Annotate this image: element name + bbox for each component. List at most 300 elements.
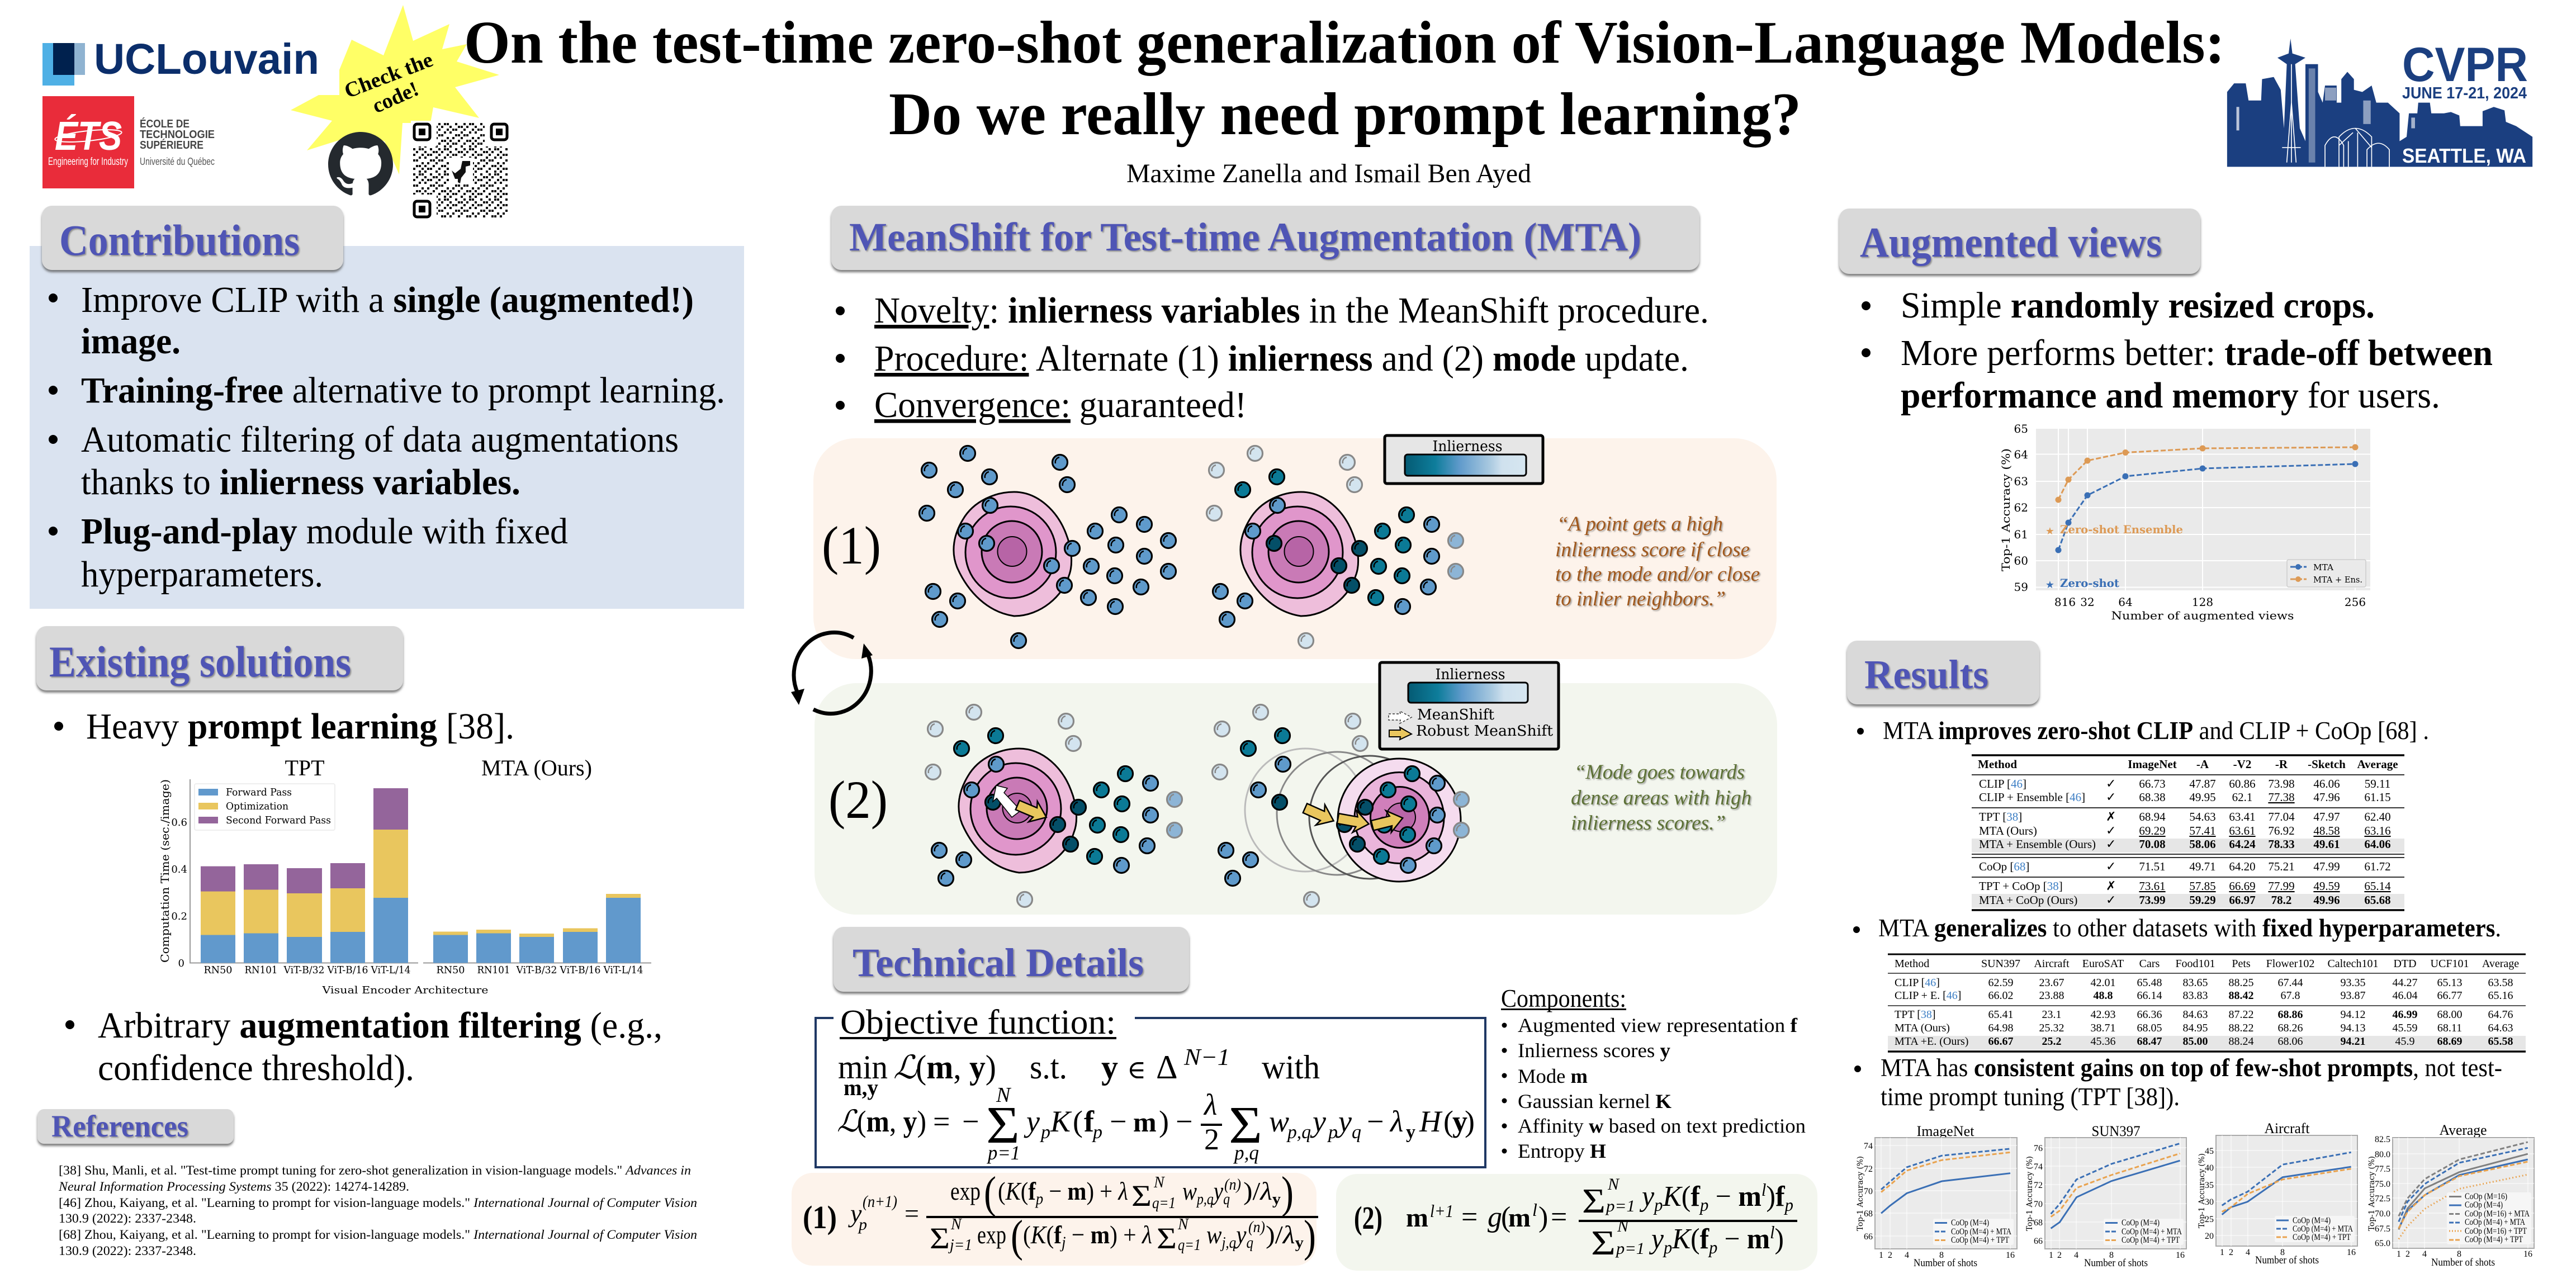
table body: ✓ xyxy=(2106,776,2116,790)
formula: loss definition: f xyxy=(1084,1105,1095,1138)
line chart: Aircraft: 45 xyxy=(2205,1147,2214,1156)
text block: references: [46] Zhou, Kaiyang, et al. "Learning to prompt for vision-language models." International Journal of Computer Vision xyxy=(59,1196,697,1210)
numerator: p=1 xyxy=(1605,1197,1635,1215)
line chart: Average: Top-1 Accuracy (%) xyxy=(2367,1156,2376,1231)
line chart: Aircraft: 30 xyxy=(2205,1197,2214,1207)
axis labels: RN50 xyxy=(436,964,465,976)
table body: 83.65 xyxy=(2182,977,2208,989)
denominator: N xyxy=(950,1216,962,1233)
legend: inlierness and arrows (2): Inlierness xyxy=(1436,666,1505,683)
table body: 57.41 xyxy=(2189,824,2216,837)
line chart: SUN397: CoOp (M=4) + TPT xyxy=(2122,1235,2180,1245)
legend: inlierness and arrows (2): Robust MeanShift xyxy=(1416,723,1554,740)
line chart: Average: 65.0 xyxy=(2375,1239,2390,1248)
numerator: − xyxy=(1043,1177,1068,1205)
logo: ETS xyxy=(42,96,215,188)
table body: 59.29 xyxy=(2189,893,2216,907)
line chart: SUN397: 74 xyxy=(2034,1162,2043,1172)
axis labels: RN101 xyxy=(245,964,277,976)
formula: loss definition: − xyxy=(962,1105,979,1138)
formula: minimisation: N−1 xyxy=(1183,1045,1230,1071)
line chart: SUN397: 16 xyxy=(2176,1251,2185,1260)
table body: 66.67 xyxy=(1988,1035,2014,1048)
heading: technical details: Technical Details xyxy=(853,940,1144,985)
quote: inlierness: to inlier neighbors.” xyxy=(1555,588,1726,610)
table body: TPT + CoOp [38] xyxy=(1979,879,2063,893)
denominator: m) + λ xyxy=(1091,1220,1153,1249)
formula: loss definition: p,q xyxy=(1233,1142,1259,1164)
text block: references: Neural Information Processing Systems 35 (2022): 14274-14289. xyxy=(58,1180,409,1194)
denominator: p=1 xyxy=(1615,1239,1645,1258)
text block: references xyxy=(58,1163,697,1258)
table body: 73.98 xyxy=(2268,777,2295,790)
table body: ✓ xyxy=(2106,823,2116,837)
axis labels: ViT-B/32 xyxy=(283,964,324,976)
formula: loss definition: ( xyxy=(1443,1105,1453,1138)
axis labels: Number of augmented views xyxy=(2111,609,2294,622)
legend: Forward Pass xyxy=(226,787,292,798)
line chart: ImageNet: 70 xyxy=(1864,1187,1873,1196)
line chart: Aircraft: CoOp (M=4) + TPT xyxy=(2293,1233,2351,1242)
formula: minimisation: Δ xyxy=(1156,1049,1178,1086)
callout: check the code star: code! xyxy=(369,77,422,118)
table body: 84.95 xyxy=(2182,1022,2208,1034)
table body: 48.8 xyxy=(2093,989,2113,1002)
line chart: ImageNet: 4 xyxy=(1905,1251,1909,1260)
line chart: Average: 8 xyxy=(2457,1249,2461,1259)
axis labels: RN101 xyxy=(477,964,510,976)
bars: TPT xyxy=(201,788,408,963)
title: Do we really need prompt learning? xyxy=(889,81,1801,148)
axis labels: 816 xyxy=(2054,595,2076,609)
table body: 78.33 xyxy=(2268,837,2295,851)
table body: 25.32 xyxy=(2039,1022,2064,1034)
denominator: p xyxy=(1708,1237,1717,1257)
quote: mode: inlierness scores.” xyxy=(1571,812,1726,835)
table body: 66.69 xyxy=(2229,879,2256,893)
formula: loss definition: − xyxy=(1110,1105,1126,1138)
text block: components: Inlierness scores y xyxy=(1518,1039,1670,1062)
table body: 64.24 xyxy=(2229,837,2256,851)
line chart: Average: Number of shots xyxy=(2431,1257,2495,1268)
panel: mode update equation: (2) xyxy=(1354,1200,1382,1236)
panel: mode update equation: = xyxy=(1461,1201,1478,1233)
text block: augmented views bullets: performance and memory for users. xyxy=(1901,375,2440,416)
table body: 64.06 xyxy=(2364,837,2391,851)
legend: MTA + Ens. xyxy=(2313,575,2362,585)
axis labels: 256 xyxy=(2345,595,2366,609)
axis labels: 32 xyxy=(2080,595,2095,609)
table body: ✗ xyxy=(2106,879,2116,893)
table body: 46.06 xyxy=(2313,777,2340,790)
table body: 62.40 xyxy=(2364,810,2391,823)
heading: results: Results xyxy=(1864,652,1988,697)
panel: inlierness update equation: y xyxy=(848,1199,862,1228)
text block: contributions bullets: Improve CLIP with a single (augmented!) xyxy=(81,280,694,320)
denominator: Σ xyxy=(1591,1224,1616,1262)
line chart: ImageNet: 74 xyxy=(1864,1142,1873,1151)
label (1): (1) xyxy=(822,515,881,575)
denominator: j,q xyxy=(1220,1234,1236,1252)
axis labels xyxy=(1999,422,2366,622)
legend: Second Forward Pass xyxy=(226,815,331,826)
axis labels: 60 xyxy=(2014,554,2028,567)
line chart: SUN397: Top-1 Accuracy (%) xyxy=(2025,1156,2034,1231)
denominator: y xyxy=(1649,1223,1664,1255)
formula: loss definition: = xyxy=(933,1105,950,1138)
line chart: SUN397: Number of shots xyxy=(2084,1257,2148,1269)
table header: Caltech101 xyxy=(2327,958,2379,970)
axis labels: 63 xyxy=(2014,475,2028,488)
table body: 88.24 xyxy=(2228,1035,2254,1048)
callout: check the code star xyxy=(291,5,499,174)
table: other datasets xyxy=(1888,954,2526,1052)
icon: cycle arrows xyxy=(791,632,873,714)
formula: minimisation xyxy=(838,1045,1320,1100)
denominator: ) xyxy=(1775,1223,1784,1255)
text block: MTA bullets: Procedure: Alternate (1) inlierness and (2) mode update. xyxy=(874,338,1689,379)
line chart: SUN397: 76 xyxy=(2034,1144,2043,1153)
numerator xyxy=(1582,1175,1793,1220)
panel: mode update equation: m xyxy=(1508,1203,1531,1233)
table header: Aircraft xyxy=(2034,958,2070,970)
line chart: SUN397: SUN397 xyxy=(2092,1123,2140,1139)
heading: augmented views: Augmented views xyxy=(1860,219,2162,266)
table header: Food101 xyxy=(2175,958,2215,970)
denominator: j xyxy=(1059,1233,1066,1252)
table body: 94.13 xyxy=(2340,1022,2366,1034)
table body: TPT [38] xyxy=(1895,1008,1936,1021)
denominator: (K(f xyxy=(1023,1220,1063,1249)
table header: UCF101 xyxy=(2431,958,2469,970)
table body: 77.04 xyxy=(2268,810,2295,823)
heading: contributions xyxy=(42,206,343,270)
panel: inlierness update equation: (1) xyxy=(803,1199,837,1235)
table body: 46.99 xyxy=(2393,1008,2417,1021)
heading: existing solutions xyxy=(36,626,403,690)
table body: 68.06 xyxy=(2277,1035,2303,1048)
numerator: K xyxy=(1663,1181,1683,1213)
line chart: ImageNet: CoOp (M=4) xyxy=(1951,1218,1989,1228)
numerator: w xyxy=(1182,1177,1200,1205)
table body: 73.99 xyxy=(2139,893,2166,907)
table body: 38.71 xyxy=(2091,1022,2115,1034)
table body: MTA (Ours) xyxy=(1979,824,2037,837)
text block: contributions bullets: Training-free alternative to prompt learning. xyxy=(81,370,725,411)
quote: inlierness xyxy=(1555,513,1760,610)
text block: components: Entropy H xyxy=(1518,1140,1606,1162)
line chart: Aircraft: 2 xyxy=(2229,1248,2233,1257)
table body xyxy=(1979,776,2391,907)
table body: 68.94 xyxy=(2139,810,2166,823)
text block: references: 130.9 (2022): 2337-2348. xyxy=(59,1244,196,1258)
table body: 63.16 xyxy=(2364,824,2391,837)
authors: Maxime Zanella and Ismail Ben Ayed xyxy=(1126,159,1531,188)
table body: 45.9 xyxy=(2395,1035,2415,1048)
axis labels: Computation Time (sec./image) xyxy=(158,779,172,963)
table body: 65.16 xyxy=(2488,989,2513,1002)
line chart: SUN397: 2 xyxy=(2057,1251,2062,1260)
denominator: )/λ xyxy=(1266,1220,1294,1249)
denominator: q=1 xyxy=(1178,1237,1201,1254)
formula: loss definition: q xyxy=(1352,1122,1361,1143)
line chart: Average: CoOp (M=4) xyxy=(2465,1200,2503,1210)
table body: 23.88 xyxy=(2039,989,2064,1002)
icon: QR code xyxy=(411,121,510,220)
table body: MTA +E. (Ours) xyxy=(1895,1035,1968,1048)
heading: objective function: Objective function: xyxy=(840,1003,1116,1041)
text block: references: [68] Zhou, Kaiyang, et al. "Learning to prompt for vision-language models." International Journal of Computer Vision xyxy=(59,1228,697,1242)
table header: Pets xyxy=(2232,958,2251,970)
formula: loss definition: Σ xyxy=(1229,1096,1262,1154)
text block: components: Augmented view representation f xyxy=(1518,1014,1798,1036)
line chart: ImageNet: CoOp (M=4) + TPT xyxy=(1951,1235,2009,1245)
formula: loss definition: ( xyxy=(1073,1105,1083,1138)
bar chart: computation time TPT vs MTA: MTA (Ours) xyxy=(481,755,592,780)
numerator xyxy=(950,1168,1294,1218)
denominator: q xyxy=(1246,1234,1253,1252)
table body: 64.20 xyxy=(2229,860,2256,873)
formula: loss definition: (m, y) xyxy=(857,1105,926,1138)
table header: Average xyxy=(2482,958,2519,970)
line chart: Average: Average xyxy=(2440,1122,2487,1138)
table body: 49.95 xyxy=(2189,790,2216,804)
denominator: (n) xyxy=(1248,1219,1265,1236)
table body: 45.36 xyxy=(2091,1035,2115,1048)
numerator: Σ xyxy=(1582,1182,1606,1220)
formula: loss definition: N xyxy=(996,1083,1012,1107)
axis labels: 65 xyxy=(2014,422,2028,435)
table body: ✗ xyxy=(2106,809,2116,823)
legend: inlierness (1): Inlierness xyxy=(1432,438,1503,455)
line chart: SUN397: 8 xyxy=(2109,1251,2114,1260)
table body: 65.58 xyxy=(2488,1035,2513,1048)
line chart: SUN397: CoOp (M=4) xyxy=(2122,1218,2160,1228)
line chart: ImageNet: 2 xyxy=(1888,1251,1892,1260)
table body: ✓ xyxy=(2106,893,2116,907)
table body: 46.04 xyxy=(2393,989,2417,1002)
numerator: exp xyxy=(950,1177,981,1205)
axis labels: 64 xyxy=(2118,595,2133,609)
heading: augmented views xyxy=(1839,209,2200,274)
table body: 47.87 xyxy=(2189,777,2216,790)
table body: 93.87 xyxy=(2340,989,2366,1002)
logo: CVPR: SEATTLE, WA xyxy=(2402,144,2526,167)
table body: 62.1 xyxy=(2232,790,2252,804)
table body: MTA (Ours) xyxy=(1895,1022,1950,1034)
line chart: Average xyxy=(2367,1122,2534,1268)
table body: 67.44 xyxy=(2277,977,2303,989)
text block: augmented views bullets: More performs better: trade-off between xyxy=(1901,333,2493,373)
table body: 66.14 xyxy=(2137,989,2162,1002)
numerator: )/λ xyxy=(1243,1177,1271,1205)
heading: MeanShift for Test-time Augmentation: MeanShift for Test-time Augmentation (MTA) xyxy=(849,215,1641,259)
text: result bullet 2: MTA generalizes to other datasets with fixed hyperparameters. xyxy=(1878,914,2501,942)
table body: 65.68 xyxy=(2364,893,2391,907)
denominator: Σ xyxy=(930,1221,950,1255)
denominator: N xyxy=(1177,1216,1189,1233)
table body: 87.22 xyxy=(2228,1008,2254,1021)
line chart: Average: 82.5 xyxy=(2375,1135,2390,1144)
heading: MeanShift for Test-time Augmentation xyxy=(831,206,1699,270)
line chart: SUN397: 68 xyxy=(2034,1218,2043,1228)
table body: 25.2 xyxy=(2042,1035,2062,1048)
legend: Optimization xyxy=(226,801,288,812)
line chart: ImageNet: 1 xyxy=(1879,1251,1883,1260)
heading: results xyxy=(1847,641,2039,704)
diagram: points coloured by inlierness xyxy=(1206,446,1464,648)
axis labels: ViT-B/16 xyxy=(327,964,368,976)
panel: inlierness update equation: p xyxy=(858,1215,867,1234)
line chart: Aircraft: 16 xyxy=(2347,1248,2356,1257)
table body: CLIP + Ensemble [46] xyxy=(1979,790,2085,804)
line chart: SUN397: 70 xyxy=(2034,1200,2043,1209)
line chart: Aircraft: 1 xyxy=(2220,1248,2224,1257)
text block: components: Components: xyxy=(1501,984,1626,1012)
line chart: ImageNet xyxy=(1856,1123,2017,1269)
panel: mode update equation: ( xyxy=(1501,1201,1510,1233)
table body: 65.41 xyxy=(1988,1008,2014,1021)
line chart: Average: 2 xyxy=(2405,1249,2410,1259)
line chart: Aircraft: Top-1 Accuracy (%) xyxy=(2198,1153,2206,1228)
table body: TPT [38] xyxy=(1979,810,2022,823)
table body: 68.26 xyxy=(2277,1022,2303,1034)
line chart: Aircraft: 4 xyxy=(2246,1248,2250,1257)
table body: 67.8 xyxy=(2281,989,2300,1002)
line chart: SUN397: 72 xyxy=(2034,1181,2043,1190)
axis labels: 0 xyxy=(178,958,184,969)
table body: 49.59 xyxy=(2313,879,2340,893)
formula: loss definition: Σ xyxy=(986,1096,1020,1154)
numerator: Σ xyxy=(1131,1179,1152,1213)
table body: 68.47 xyxy=(2137,1035,2162,1048)
legend: inlierness and arrows (2): MeanShift xyxy=(1417,707,1495,723)
table body: 73.61 xyxy=(2139,879,2166,893)
formula: loss definition: 2 xyxy=(1204,1123,1219,1156)
text: result bullet 3: MTA has consistent gains on top of few-shot prompts, not test- xyxy=(1881,1054,2502,1082)
quote: inlierness: “A point gets a high xyxy=(1557,513,1723,536)
text block: arbitrary filtering xyxy=(65,1005,662,1088)
table body: 76.92 xyxy=(2268,824,2295,837)
line chart: accuracy vs number of augmented views: Zero-shot Ensemble xyxy=(2060,523,2183,536)
diagram: meanshift vs robust meanshift step xyxy=(926,704,1182,907)
formula: loss definition: λ xyxy=(1389,1105,1403,1138)
table body: 94.21 xyxy=(2340,1035,2366,1048)
formula: loss definition: ℒ xyxy=(837,1104,859,1139)
numerator: (n) xyxy=(1224,1176,1241,1194)
formula: loss definition: w xyxy=(1269,1105,1289,1138)
heading: existing solutions: Existing solutions xyxy=(49,637,351,686)
table header: -V2 xyxy=(2233,757,2251,771)
axis labels: 0.2 xyxy=(171,911,187,922)
table body xyxy=(1895,958,2513,1048)
formula: loss definition: y xyxy=(1310,1105,1326,1138)
logo: ETS: TECHNOLOGIE xyxy=(140,129,215,141)
legend xyxy=(2287,560,2366,587)
table body: 68.05 xyxy=(2137,1022,2162,1034)
line chart: Aircraft: 8 xyxy=(2280,1248,2285,1257)
numerator: m) + λ xyxy=(1068,1177,1129,1205)
axis labels: RN50 xyxy=(203,964,233,976)
title xyxy=(464,10,2225,148)
table body: 68.00 xyxy=(2437,1008,2462,1021)
text block: components xyxy=(1501,984,1806,1162)
denominator: ) xyxy=(1304,1212,1316,1261)
formula: loss definition: y xyxy=(1452,1105,1467,1138)
table header: Average xyxy=(2357,757,2398,771)
line chart: ImageNet: Top-1 Accuracy (%) xyxy=(1856,1156,1865,1231)
table header: SUN397 xyxy=(1981,958,2020,970)
text block: contributions bullets: Plug-and-play module with fixed xyxy=(81,511,568,552)
line chart: accuracy vs number of augmented views: Zero-shot xyxy=(2060,576,2120,590)
line chart: Average: 77.5 xyxy=(2375,1164,2390,1174)
formula: loss definition: m xyxy=(1133,1106,1157,1138)
axis labels: 64 xyxy=(2014,448,2028,461)
table body: 23.67 xyxy=(2039,977,2064,989)
line chart: Aircraft: Number of shots xyxy=(2255,1254,2319,1266)
numerator: q xyxy=(1223,1191,1230,1208)
table body: 60.86 xyxy=(2229,777,2256,790)
table body: 47.97 xyxy=(2313,810,2340,823)
denominator xyxy=(1591,1217,1784,1262)
table body: 54.63 xyxy=(2189,810,2216,823)
numerator: (f xyxy=(1682,1181,1701,1213)
numerator: y xyxy=(1211,1177,1224,1205)
table header: EuroSAT xyxy=(2082,958,2124,970)
bar chart: computation time TPT vs MTA: TPT xyxy=(285,755,325,780)
denominator: − xyxy=(1066,1220,1091,1249)
table body: 49.71 xyxy=(2189,860,2216,873)
formula: loss definition: p xyxy=(1092,1122,1102,1143)
denominator: − xyxy=(1717,1223,1747,1255)
table body: 59.11 xyxy=(2365,777,2390,790)
denominator: ( xyxy=(1011,1212,1023,1261)
axis labels: Top-1 Accuracy (%) xyxy=(1999,448,2012,571)
panel: mode update equation: l xyxy=(1532,1200,1537,1220)
formula: loss definition: λ xyxy=(1203,1088,1217,1121)
table body: ✓ xyxy=(2106,859,2116,873)
text block: MTA bullets xyxy=(836,290,1709,425)
quote: mode: “Mode goes towards xyxy=(1574,761,1745,784)
line chart: Average: CoOp (M=16) + TPT xyxy=(2465,1227,2527,1236)
line chart: accuracy vs number of augmented views xyxy=(1999,422,2370,622)
table body: 64.63 xyxy=(2488,1022,2513,1034)
line chart: Aircraft: CoOp (M=4) xyxy=(2293,1216,2331,1225)
text block: contributions bullets: hyperparameters. xyxy=(81,554,323,595)
numerator: − xyxy=(1708,1181,1738,1213)
formula: loss definition: ) xyxy=(1465,1105,1475,1138)
numerator: p xyxy=(1699,1195,1708,1215)
line chart: Average: 1 xyxy=(2397,1249,2401,1259)
numerator: m xyxy=(1738,1181,1761,1213)
line chart: SUN397 xyxy=(2025,1123,2186,1269)
denominator: y xyxy=(1234,1220,1247,1249)
table body: 65.14 xyxy=(2364,879,2391,893)
table body: 68.38 xyxy=(2139,790,2166,804)
text block: components: Mode m xyxy=(1518,1065,1588,1087)
numerator: ) xyxy=(1281,1168,1294,1218)
formula: minimisation: ∈ xyxy=(1127,1054,1146,1085)
numerator: l xyxy=(1761,1180,1767,1200)
formula: loss definition: y xyxy=(1336,1105,1352,1138)
legend xyxy=(195,784,335,830)
numerator: p xyxy=(1653,1195,1663,1215)
table body: 77.38 xyxy=(2268,790,2295,804)
line chart: ImageNet: 66 xyxy=(1864,1232,1873,1242)
numerator: f xyxy=(1775,1181,1785,1213)
axis labels: 0.4 xyxy=(171,864,187,875)
heading: technical details xyxy=(834,927,1189,992)
